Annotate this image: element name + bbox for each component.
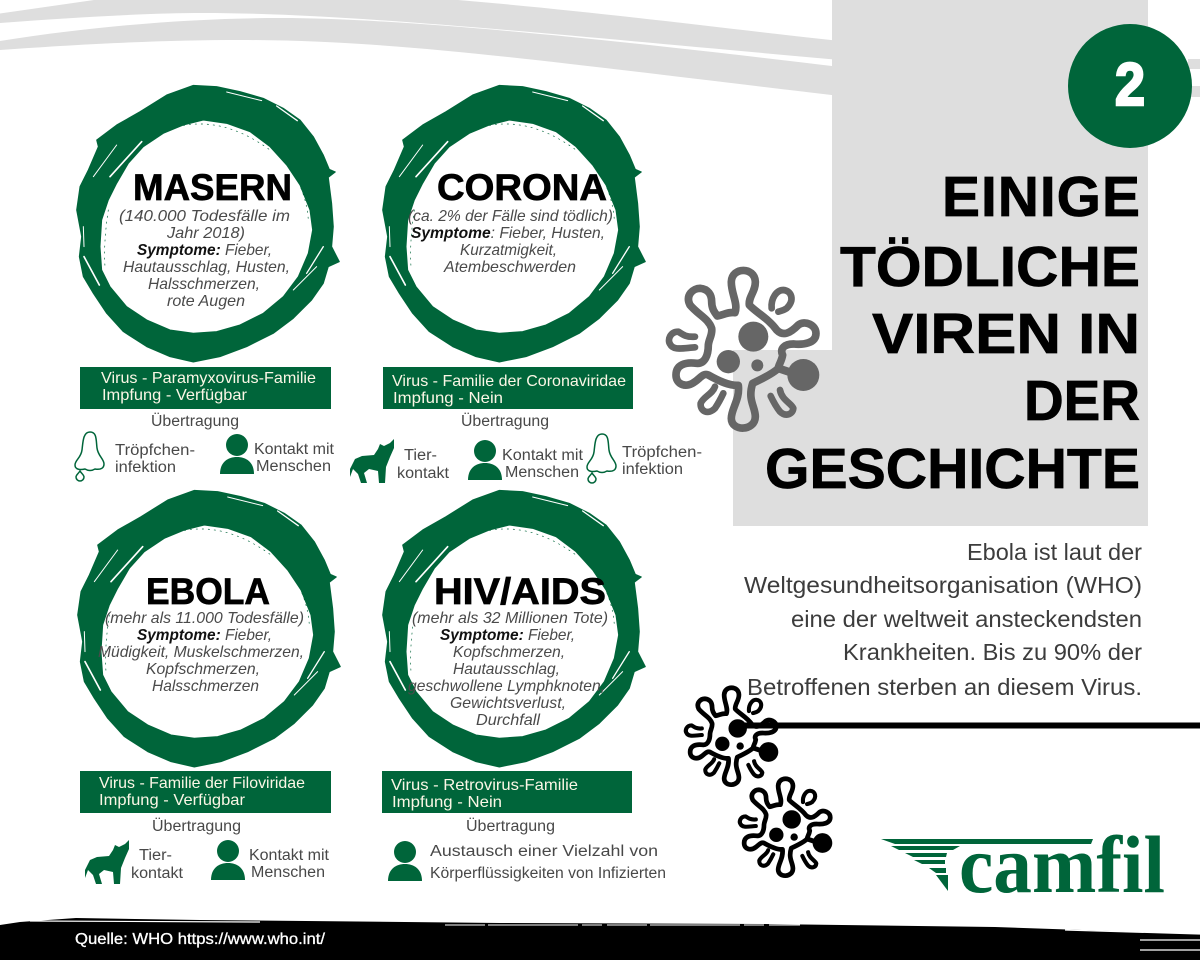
label: human contact xyxy=(249,847,330,881)
label: droplet infection xyxy=(115,442,195,476)
text: HIV/AIDS details: Gewichtsverlust, xyxy=(450,695,566,712)
source: Quelle: WHO https://www.who.int/ xyxy=(75,931,326,948)
text: HIV/AIDS details: Hautausschlag, xyxy=(453,661,560,678)
icon: person xyxy=(468,440,502,480)
label: Übertragung: Übertragung xyxy=(152,817,241,835)
text: HIV/AIDS details xyxy=(408,610,608,729)
label: droplet infection: Tröpfchen- xyxy=(115,442,195,459)
label: droplet infection: infektion xyxy=(115,459,176,476)
bottom brush stroke xyxy=(0,918,1200,960)
title: DER xyxy=(1024,369,1140,433)
label: animal contact: kontakt xyxy=(397,465,450,482)
heading: Ebola: EBOLA xyxy=(146,571,270,612)
icon: black virus lower xyxy=(740,779,832,876)
background brush strokes xyxy=(0,0,1200,97)
icon: person xyxy=(220,434,254,474)
info box: Masern: Virus - Paramyxovirus-Familie xyxy=(101,370,316,387)
panel: Ebola xyxy=(78,490,340,884)
text: Corona details: Symptome: Fieber, Husten, xyxy=(411,225,605,242)
ring: Masern xyxy=(77,85,339,362)
label: droplet infection: infektion xyxy=(622,461,683,478)
label: animal contact: Tier- xyxy=(404,447,437,464)
label: human contact: Menschen xyxy=(256,458,331,475)
info box: Masern: Impfung - Verfügbar xyxy=(102,387,248,404)
ring: Ebola xyxy=(78,490,340,767)
text: HIV/AIDS details: geschwollene Lymphknoten, xyxy=(408,678,605,695)
grey title panel xyxy=(733,0,1148,526)
icon: nose xyxy=(587,434,616,483)
label: animal contact xyxy=(397,447,450,482)
info box: Corona xyxy=(383,367,633,409)
title: VIREN IN xyxy=(872,302,1140,366)
text: Masern details xyxy=(119,208,290,310)
logo: camfil: camfil xyxy=(959,819,1165,910)
text: Masern details: Symptome: Fieber, xyxy=(137,242,272,259)
label: Übertragung: Übertragung xyxy=(461,412,549,430)
text: Masern details: Jahr 2018) xyxy=(166,225,245,242)
text: Corona details: (ca. 2% der Fälle sind tödlich) xyxy=(408,208,613,225)
title: TÖDLICHE xyxy=(840,235,1140,299)
label: animal contact: kontakt xyxy=(131,865,184,882)
title xyxy=(765,165,1140,501)
description text: eine der weltweit ansteckendsten xyxy=(791,606,1142,632)
label: animal contact: Tier- xyxy=(139,847,172,864)
label: human contact: Kontakt mit xyxy=(249,847,330,864)
label: body fluids xyxy=(430,843,666,882)
label: human contact xyxy=(502,447,584,481)
label: droplet infection xyxy=(622,444,702,478)
ring: Corona xyxy=(383,85,645,362)
label: human contact xyxy=(254,441,335,475)
label: body fluids: Körperflüssigkeiten von Infizierten xyxy=(430,865,666,882)
description text: Krankheiten. Bis zu 90% der xyxy=(843,639,1142,665)
label: human contact: Menschen xyxy=(251,864,325,881)
text: HIV/AIDS details: Kopfschmerzen, xyxy=(453,644,565,661)
text: Ebola details: (mehr als 11.000 Todesfälle) xyxy=(105,610,304,627)
label: animal contact xyxy=(131,847,184,882)
info box: Masern xyxy=(80,367,331,409)
info box: HIV/AIDS: Virus - Retrovirus-Familie xyxy=(391,777,578,794)
panel: HIV/AIDS xyxy=(382,490,666,882)
text: Corona details xyxy=(408,208,613,276)
text: Ebola details: Symptome: Fieber, xyxy=(137,627,272,644)
icon: grey virus xyxy=(669,270,819,428)
label: Übertragung: Übertragung xyxy=(151,412,239,430)
label: human contact: Kontakt mit xyxy=(502,447,584,464)
text: Ebola details xyxy=(98,610,304,695)
ring: HIV/AIDS xyxy=(383,490,645,767)
description text: Weltgesundheitsorganisation (WHO) xyxy=(744,572,1142,598)
heading: Corona: CORONA xyxy=(437,167,607,208)
icon: person xyxy=(388,841,422,881)
text: Masern details: rote Augen xyxy=(167,293,245,310)
panel: Corona xyxy=(350,85,702,483)
title: GESCHICHTE xyxy=(765,437,1140,501)
icon: wolf xyxy=(350,439,394,483)
icon: black virus upper xyxy=(686,688,778,785)
info box: Corona: Virus - Familie der Coronaviridae xyxy=(392,373,626,390)
text: Masern details: Hautausschlag, Husten, xyxy=(123,259,290,276)
text: Ebola details: Kopfschmerzen, xyxy=(146,661,260,678)
info box: Ebola xyxy=(80,771,331,813)
description text: Betroffenen sterben an diesem Virus. xyxy=(747,674,1142,700)
icon: nose xyxy=(75,432,104,481)
heading: HIV/AIDS: HIV/AIDS xyxy=(434,571,606,612)
info box: HIV/AIDS: Impfung - Nein xyxy=(392,794,502,811)
description text xyxy=(744,539,1142,700)
icon: wolf xyxy=(85,840,129,884)
text: HIV/AIDS details: Durchfall xyxy=(476,712,540,729)
divider line xyxy=(745,722,1200,728)
text: Ebola details: Müdigkeit, Muskelschmerzen, xyxy=(98,644,304,661)
info box: HIV/AIDS xyxy=(382,771,632,813)
heading: Masern: MASERN xyxy=(133,167,292,208)
panel: Masern xyxy=(75,85,339,481)
label: droplet infection: Tröpfchen- xyxy=(622,444,702,461)
title: EINIGE xyxy=(942,165,1140,229)
number badge: 2 xyxy=(1115,51,1145,118)
info box: Ebola: Virus - Familie der Filoviridae xyxy=(99,775,305,792)
logo: camfil xyxy=(881,819,1165,910)
label: Übertragung: Übertragung xyxy=(466,817,555,835)
text: Masern details: Halsschmerzen, xyxy=(148,276,260,293)
label: human contact: Kontakt mit xyxy=(254,441,335,458)
label: body fluids: Austausch einer Vielzahl von xyxy=(430,843,658,860)
text: Masern details: (140.000 Todesfälle im xyxy=(119,208,290,225)
text: HIV/AIDS details: (mehr als 32 Millionen Tote) xyxy=(412,610,608,627)
text: Corona details: Atembeschwerden xyxy=(443,259,576,276)
icon: person xyxy=(211,840,245,880)
text: Ebola details: Halsschmerzen xyxy=(152,678,259,695)
text: HIV/AIDS details: Symptome: Fieber, xyxy=(440,627,575,644)
number badge xyxy=(1068,24,1192,148)
text: Corona details: Kurzatmigkeit, xyxy=(460,242,557,259)
label: human contact: Menschen xyxy=(505,464,579,481)
info box: Ebola: Impfung - Verfügbar xyxy=(99,792,246,809)
description text: Ebola ist laut der xyxy=(967,539,1142,565)
info box: Corona: Impfung - Nein xyxy=(393,390,503,407)
